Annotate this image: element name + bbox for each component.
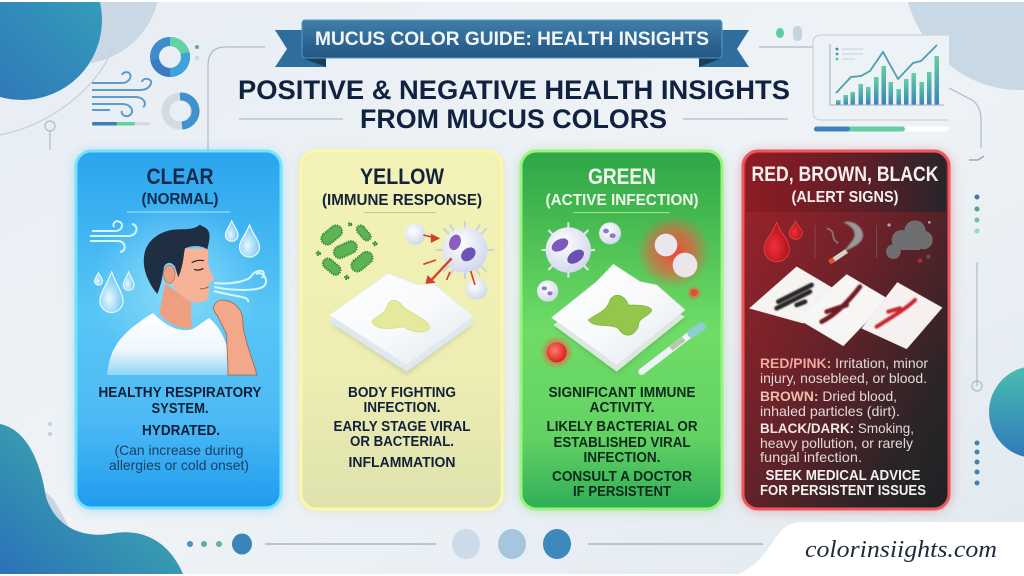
- decorative corner blob top right: [908, 2, 1024, 90]
- green dot and pill: [776, 26, 802, 41]
- chart trend line: [836, 45, 937, 93]
- icon: donut chart top: [154, 41, 186, 73]
- panel body text: HYDRATED.: [142, 423, 220, 439]
- panel body text: fungal infection.: [760, 449, 862, 465]
- panel body text: BROWN: Dried blood,: [760, 388, 897, 404]
- illustration: cells, tissue, thermometer: [537, 213, 710, 373]
- small progress bar left: [92, 122, 150, 126]
- decorative blob right: [989, 366, 1024, 458]
- panel body text: CONSULT A DOCTOR: [552, 469, 692, 485]
- panel body text: SIGNIFICANT IMMUNE: [548, 385, 696, 401]
- panel body text: IF PERSISTENT: [573, 484, 671, 500]
- bar chart: [836, 56, 939, 105]
- icon: stained tissues: [749, 267, 942, 349]
- icon: wind left: [90, 221, 137, 252]
- icon: thermometer: [642, 327, 702, 372]
- website tab: colorinsiights.com: [805, 537, 997, 563]
- panel body text: (Can increase during: [114, 442, 244, 458]
- panel body text: heavy pollution, or rarely: [760, 435, 913, 451]
- main heading: POSITIVE & NEGATIVE HEALTH INSIGHTS: [238, 75, 790, 105]
- right side dots: [974, 194, 980, 486]
- divider lines: [815, 225, 877, 258]
- main heading: FROM MUCUS COLORS: [360, 104, 667, 134]
- panel heading: (NORMAL): [142, 191, 218, 208]
- icon: cigarette with smoke: [827, 222, 863, 262]
- panel background: [300, 151, 503, 510]
- icon: red arrows: [423, 235, 475, 285]
- icon: immune cells: [537, 222, 697, 302]
- icon: wind lines: [92, 72, 151, 116]
- panel heading: [752, 163, 938, 206]
- icon: blood drops: [764, 221, 802, 262]
- icon: tissue with green mucus: [552, 264, 685, 373]
- panel body text: SEEK MEDICAL ADVICE: [766, 468, 921, 484]
- panel body text: [760, 355, 928, 499]
- panel body text: LIKELY BACTERIAL OR: [546, 419, 698, 435]
- panel body text: injury, nosebleed, or blood.: [760, 370, 927, 386]
- shirt: [107, 313, 232, 375]
- panel body text: [546, 385, 698, 500]
- panel body text: RED/PINK: Irritation, minor: [760, 355, 928, 371]
- panel heading: (IMMUNE RESPONSE): [322, 192, 482, 209]
- panel body text: ACTIVITY.: [590, 400, 654, 416]
- bottom dots and lines: [187, 529, 763, 559]
- illustration: bacteria, immune cells, tissue: [317, 213, 494, 375]
- panel body text: INFLAMMATION: [348, 455, 456, 471]
- chart panel: [813, 35, 949, 120]
- panel heading: YELLOW: [360, 164, 444, 189]
- main heading: [238, 75, 790, 134]
- panel body text: INFECTION.: [584, 450, 660, 466]
- icon: breath exhale: [214, 271, 266, 302]
- panel body text: ESTABLISHED VIRAL: [554, 435, 691, 451]
- chart axes: [830, 44, 944, 105]
- panel body text: [98, 385, 262, 473]
- panel body text: BLACK/DARK: Smoking,: [760, 420, 914, 436]
- decorative corner blobs top left: [0, 0, 160, 100]
- panel body text: INFECTION.: [364, 400, 440, 416]
- panel heading: (ACTIVE INFECTION): [546, 192, 698, 209]
- decorative lines: [0, 47, 984, 391]
- heading dividers: [239, 118, 788, 120]
- panel heading: [546, 164, 698, 209]
- panel body text: SYSTEM.: [152, 401, 208, 417]
- panel: yellow: [300, 151, 503, 510]
- panel heading: [322, 164, 482, 209]
- panel heading: GREEN: [588, 164, 656, 189]
- icon: dark cloud: [886, 220, 933, 263]
- icon: red spots: [540, 285, 701, 369]
- panel heading: [142, 164, 218, 208]
- head: [144, 225, 214, 328]
- panel heading: CLEAR: [146, 164, 214, 189]
- panel heading: (ALERT SIGNS): [792, 189, 898, 206]
- icon: water drops: [94, 221, 260, 312]
- panel: clear: [75, 151, 282, 510]
- panel body text: inhaled particles (dirt).: [760, 403, 900, 419]
- panel body text: OR BACTERIAL.: [350, 434, 454, 450]
- panel body text: EARLY STAGE VIRAL: [334, 419, 471, 435]
- small dots near donut: [195, 45, 199, 60]
- icon: immune cells: [404, 221, 494, 300]
- panel body text: allergies or cold onset): [109, 457, 249, 473]
- panel: red brown black: [742, 151, 950, 510]
- title ribbon: [275, 20, 749, 67]
- decorative wave bottom left: [0, 424, 183, 574]
- icon: bacteria: [317, 223, 377, 279]
- chart progress bar: [814, 126, 949, 132]
- panel: green: [520, 151, 723, 510]
- panel heading: RED, BROWN, BLACK: [752, 163, 938, 186]
- icon: red infection glow: [637, 215, 710, 288]
- panel background: [75, 151, 282, 510]
- illustration: blood, cigarette, smog, tissues: [749, 220, 942, 349]
- arm and hand: [214, 300, 257, 375]
- panel background: [742, 151, 950, 510]
- left side dots: [48, 422, 52, 436]
- panel background: [520, 151, 723, 510]
- icon: donut chart lower: [166, 96, 196, 126]
- chart legend: [836, 48, 863, 60]
- title ribbon: MUCUS COLOR GUIDE: HEALTH INSIGHTS: [315, 29, 709, 50]
- panel body text: BODY FIGHTING: [348, 385, 456, 401]
- panel body text: FOR PERSISTENT ISSUES: [760, 483, 926, 499]
- panel body text: HEALTHY RESPIRATORY: [98, 385, 262, 401]
- icon: tissue with yellow mucus: [329, 273, 473, 375]
- illustration: man breathing: [91, 200, 261, 375]
- panel body text: [334, 385, 471, 471]
- website tab: [738, 522, 1024, 574]
